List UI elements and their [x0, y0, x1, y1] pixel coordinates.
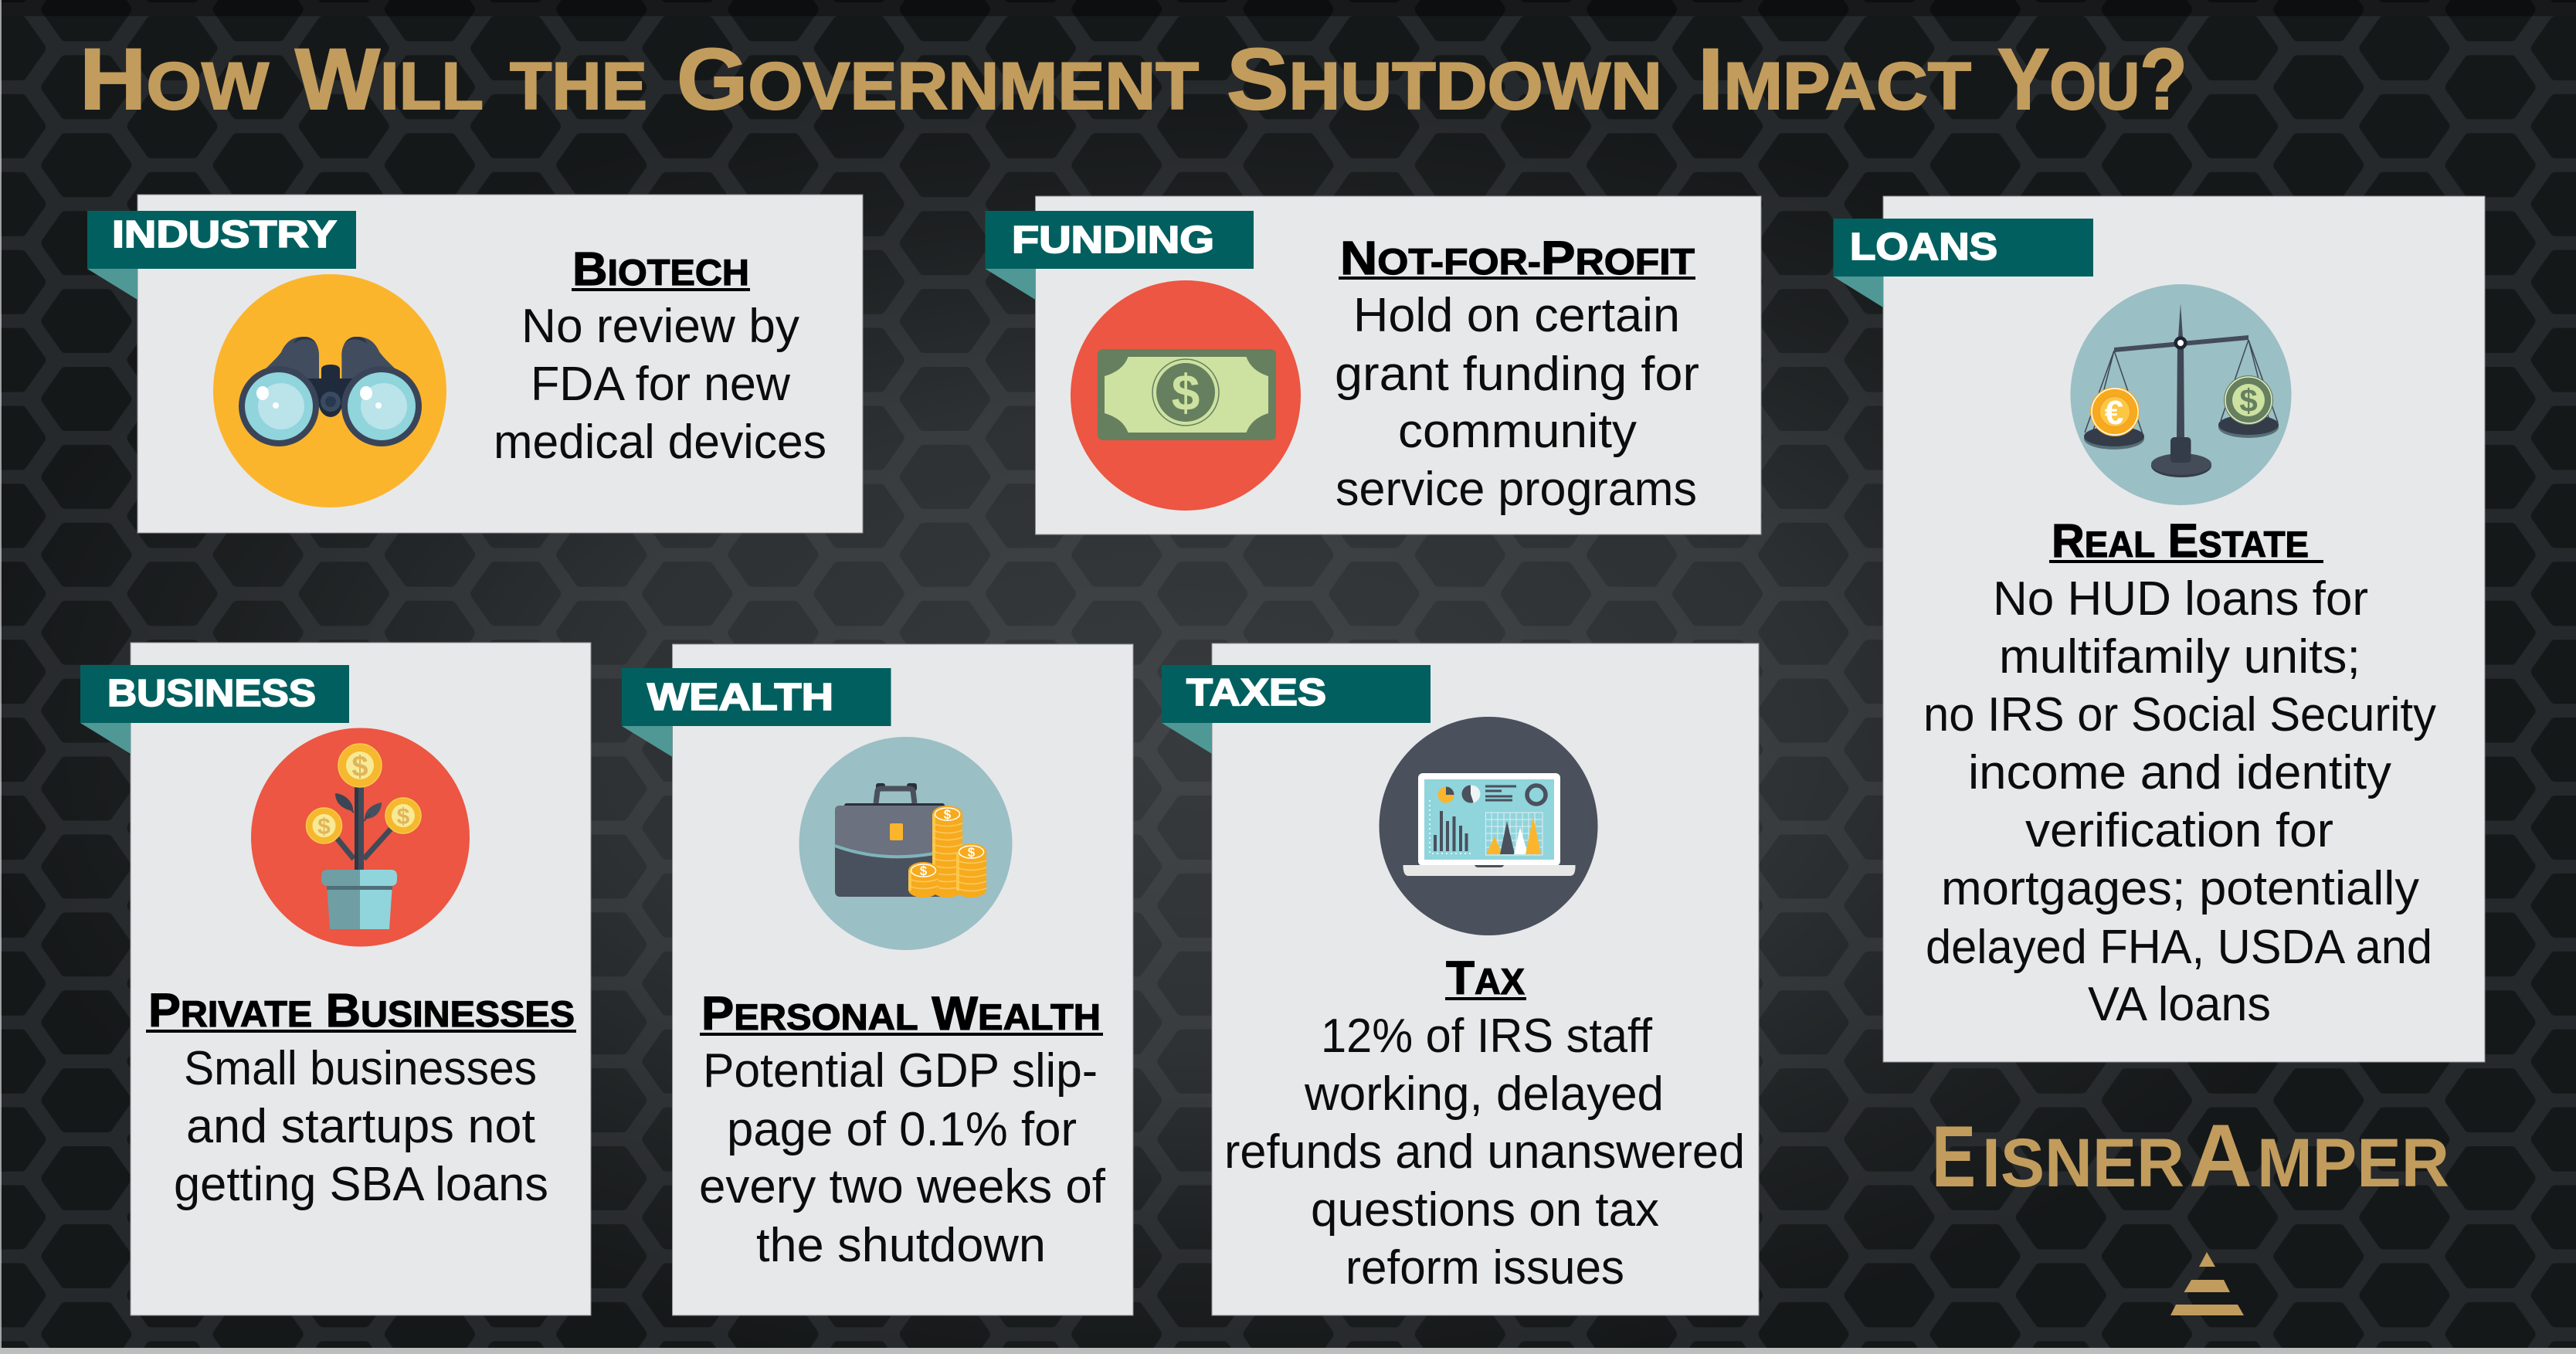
ribbon tag: loans [1834, 219, 2093, 307]
icon: balance scale with coins: € [2105, 394, 2123, 432]
text: tax description: reform issues [1346, 1241, 1624, 1295]
heading: tax: TAX [1446, 952, 1525, 1004]
text: private businesses description: and startups not [186, 1100, 535, 1153]
text: personal wealth description: the shutdown [756, 1219, 1046, 1272]
ribbon tag: business [80, 665, 349, 754]
text: not-for-profit description: Hold on certain [1353, 289, 1680, 342]
panel: loans / real estate [1834, 196, 2485, 1062]
ribbon tag: wealth [622, 668, 891, 757]
title: SHUTDOWN [1227, 31, 1635, 127]
text: personal wealth description [699, 1044, 1106, 1272]
panel: taxes / tax [1162, 643, 1759, 1315]
ribbon tag: business: BUSINESS [107, 673, 316, 714]
text: personal wealth description: every two weeks of [699, 1160, 1106, 1213]
text: private businesses description: getting SBA loans [174, 1158, 548, 1211]
title: YOU? [1997, 31, 2193, 127]
heading: real estate: REAL ESTATE [2052, 514, 2309, 567]
title: IMPACT [1698, 31, 1955, 127]
text: biotech description [494, 300, 826, 469]
title: GOVERNMENT [677, 31, 1173, 127]
icon: balance scale with coins: $ [2239, 382, 2258, 419]
ribbon tag: taxes: TAXES [1186, 672, 1326, 714]
icon: briefcase with coins: $ [944, 807, 952, 822]
text: not-for-profit description: community [1398, 405, 1637, 458]
ribbon tag: industry: INDUSTRY [112, 214, 337, 256]
ribbon tag: funding [986, 211, 1254, 300]
text: tax description: 12% of IRS staff [1321, 1010, 1653, 1063]
ribbon tag: wealth: WEALTH [647, 677, 833, 718]
logo: EisnerAmper wordmark: A [2189, 1107, 2252, 1206]
text: tax description: working, delayed [1304, 1067, 1664, 1121]
text: biotech description: FDA for new [531, 358, 790, 411]
panel: funding / not-for-profit [986, 196, 1761, 534]
text: personal wealth description: Potential GDP slip- [703, 1044, 1098, 1098]
text: real estate description: verification for [2025, 804, 2333, 857]
text: tax description [1224, 1010, 1745, 1295]
text: private businesses description: Small businesses [184, 1042, 537, 1095]
icon: briefcase with coins: $ [920, 864, 928, 878]
icon: dollar bill: $ [1172, 364, 1200, 421]
heading: personal wealth: PERSONAL WEALTH [701, 987, 1101, 1040]
panel: wealth / personal wealth [622, 644, 1133, 1315]
panel: business / private businesses [80, 643, 591, 1315]
title: THE [510, 49, 647, 124]
text: real estate description [1923, 572, 2436, 1031]
heading: not-for-profit: NOT-FOR- PROFIT [1340, 232, 1695, 284]
icon: briefcase with coins [799, 737, 1012, 950]
text: real estate description: multifamily units; [1999, 630, 2360, 684]
text: real estate description: delayed FHA, USDA and [1926, 921, 2432, 974]
ribbon tag: industry [87, 211, 356, 300]
ribbon tag: funding: FUNDING [1012, 219, 1214, 261]
title: WILL [295, 31, 480, 127]
icon: dollar bill [1071, 280, 1301, 511]
icon: money plant: $ [351, 751, 368, 783]
text: real estate description: VA loans [2088, 978, 2271, 1031]
text: biotech description: No review by [521, 300, 799, 353]
icon: briefcase with coins: $ [968, 845, 976, 860]
heading: private businesses: PRIVATE BUSINESSES [148, 984, 575, 1037]
icon: laptop with charts [1380, 717, 1597, 935]
text: not-for-profit description: grant funding for [1335, 348, 1699, 401]
text: not-for-profit description: service programs [1336, 463, 1697, 516]
icon: binoculars [213, 274, 446, 507]
text: tax description: refunds and unanswered [1224, 1125, 1745, 1179]
title: HOW [80, 31, 261, 127]
logo: pyramid mark [2170, 1252, 2244, 1315]
icon: money plant: $ [317, 814, 331, 840]
logo: EisnerAmper wordmark: MPER [2257, 1124, 2449, 1201]
ribbon tag: loans: LOANS [1850, 226, 1997, 268]
text: personal wealth description: page of 0.1% for [727, 1103, 1077, 1156]
text: real estate description: No HUD loans for [1993, 572, 2368, 626]
text: real estate description: mortgages; potentially [1941, 862, 2419, 915]
heading: biotech: BIOTECH [572, 243, 749, 295]
text: real estate description: income and identity [1968, 746, 2391, 799]
icon: balance scale with coins [2070, 284, 2291, 505]
text: private businesses description [174, 1042, 548, 1211]
icon: money plant [251, 728, 470, 947]
ribbon tag: taxes [1162, 665, 1431, 754]
logo: EisnerAmper wordmark: ISNER [1982, 1124, 2184, 1201]
text: tax description: questions on tax [1311, 1183, 1659, 1237]
text: real estate description: no IRS or Social Security [1923, 688, 2436, 741]
panel: industry / biotech [87, 195, 863, 533]
logo: EisnerAmper wordmark: E [1932, 1108, 1976, 1205]
text: not-for-profit description [1335, 289, 1699, 516]
icon: money plant: $ [397, 804, 410, 830]
text: biotech description: medical devices [494, 416, 826, 469]
